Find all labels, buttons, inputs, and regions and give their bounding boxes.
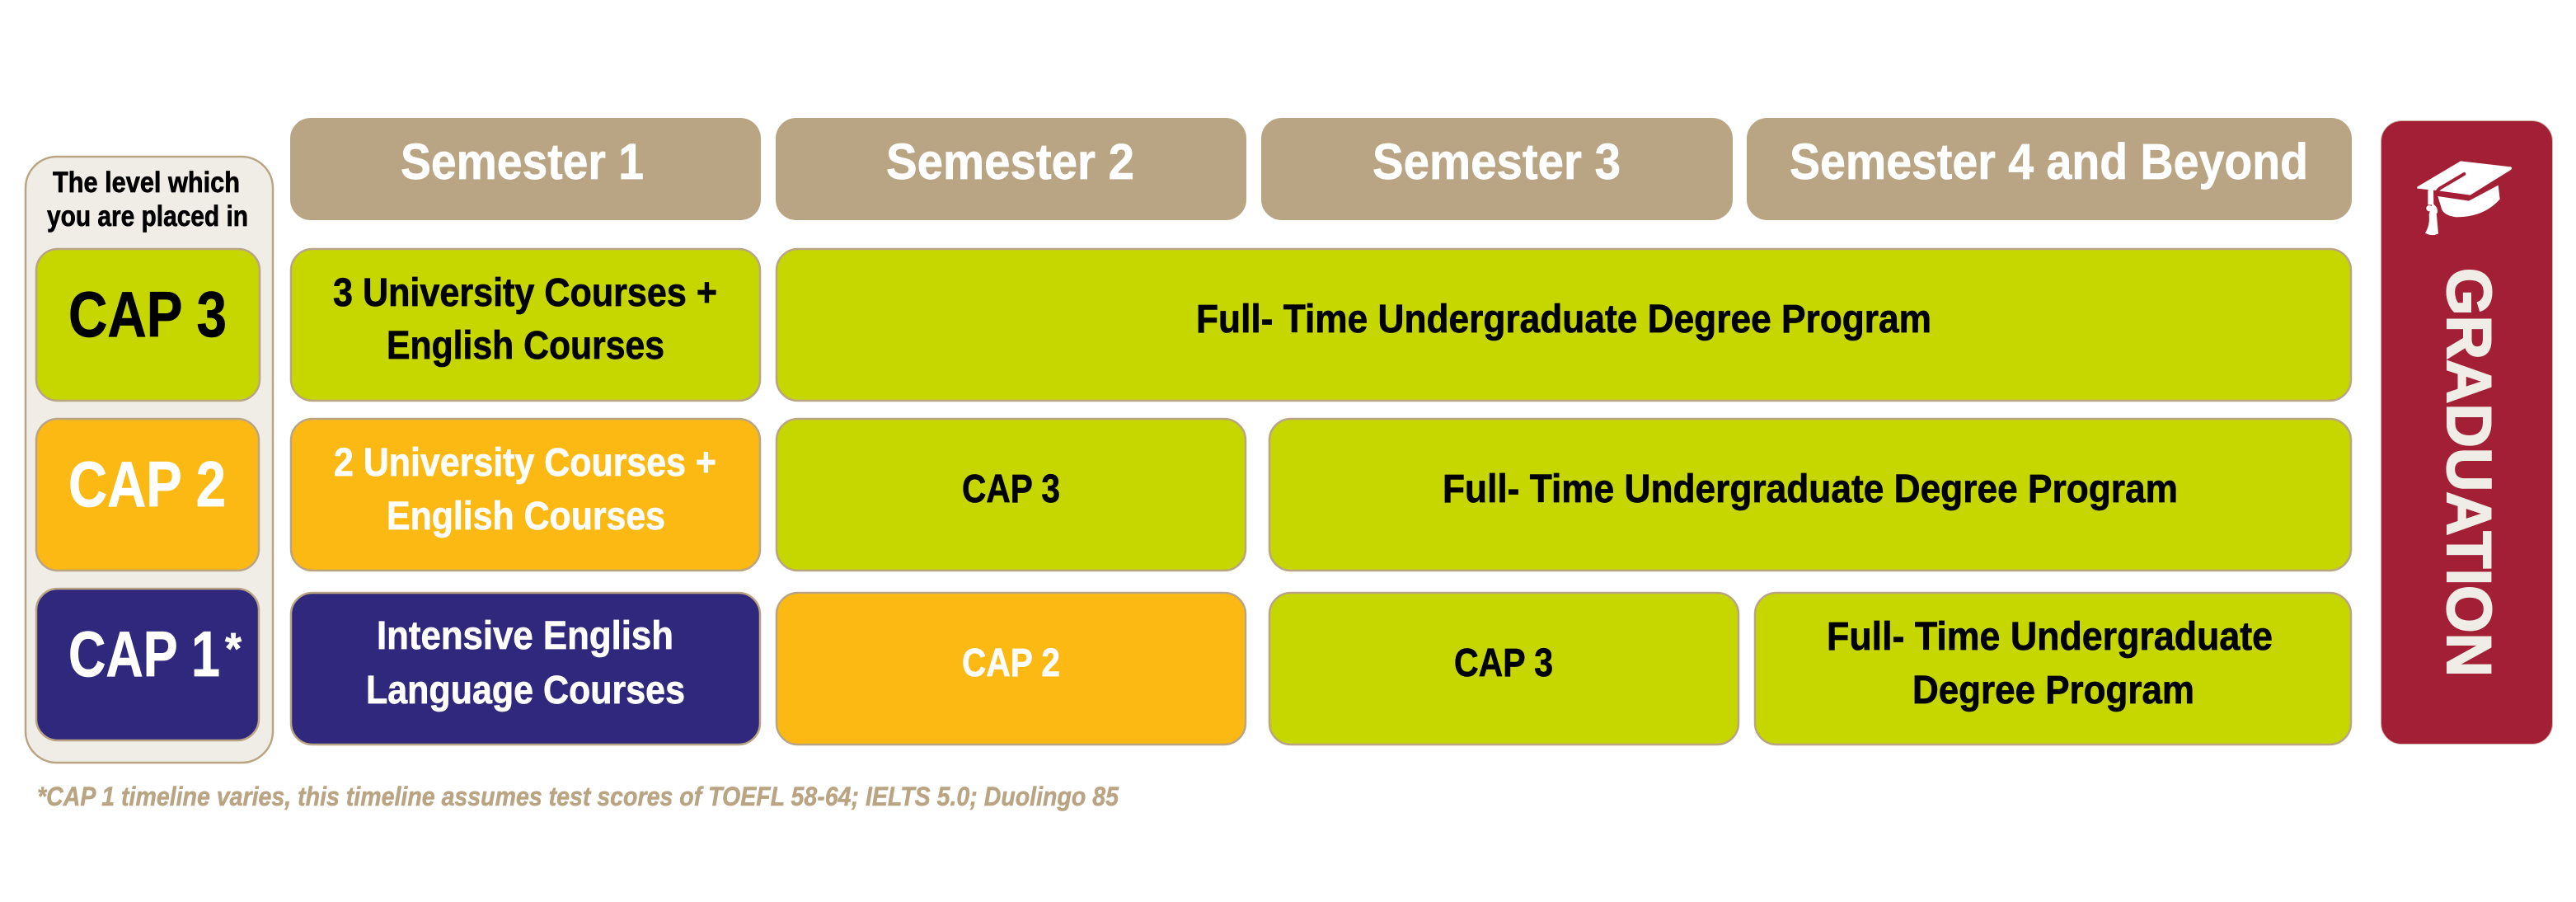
semester header: Semester 1: Semester 1 (401, 134, 644, 190)
semester header: Semester 4 and Beyond: Semester 4 and Beyond (1790, 134, 2308, 190)
row: CAP 1 first semester: Language Courses (366, 669, 685, 712)
level: CAP 2 (36, 419, 259, 571)
level: CAP 1 (36, 589, 259, 740)
level: CAP 1: CAP 1 (68, 618, 220, 690)
row: CAP 1 first semester (291, 593, 760, 745)
row: CAP 2 then CAP 3 (777, 419, 1246, 571)
panel: placement levels (26, 157, 273, 763)
row: CAP 2 degree program (1269, 419, 2351, 571)
row: CAP 3 first semester: 3 University Courses + (333, 271, 717, 315)
semester header: Semester 3 (1261, 118, 1733, 220)
row: CAP 1 degree program: Full- Time Undergraduate (1827, 615, 2273, 659)
vertical label: GRADUATION: GRADUATION (2433, 268, 2503, 677)
row: CAP 1 then CAP 3 (1269, 593, 1738, 745)
row: CAP 3 first semester: English Courses (387, 324, 664, 368)
panel: graduation (2381, 120, 2552, 744)
semester header: Semester 2 (776, 118, 1246, 220)
icon: graduation cap (2417, 161, 2512, 235)
level: CAP 2: CAP 2 (68, 448, 226, 520)
row: CAP 1 then CAP 2 (777, 593, 1246, 745)
semester header: Semester 3: Semester 3 (1372, 134, 1621, 190)
row: CAP 2 then CAP 3: CAP 3 (962, 467, 1060, 511)
row: CAP 1 degree program: Degree Program (1912, 669, 2194, 712)
row: CAP 3 degree program (777, 249, 2351, 401)
heading: the level which you are placed in (47, 167, 248, 233)
level: CAP 3: CAP 3 (68, 278, 227, 350)
row: CAP 3 degree program: Full- Time Undergraduate Degree Program (1196, 298, 1931, 341)
level: CAP 3 (36, 249, 260, 401)
level: CAP 1: * (225, 624, 242, 674)
row: CAP 2 first semester (291, 419, 760, 571)
footnote: *CAP 1 timeline varies, this timeline assumes test scores of TOEFL 58-64; IELTS 5.0; Duolingo 85 (37, 782, 1119, 811)
row: CAP 1 degree program (1755, 593, 2351, 745)
row: CAP 1 first semester: Intensive English (377, 614, 673, 658)
row: CAP 2 degree program: Full- Time Undergraduate Degree Program (1443, 467, 2178, 511)
heading: the level which you are placed in: you are placed in (47, 200, 248, 233)
semester header: Semester 1 (290, 118, 761, 220)
row: CAP 2 first semester: English Courses (387, 495, 665, 538)
row: CAP 2 first semester: 2 University Courses + (334, 441, 716, 485)
semester header: Semester 4 and Beyond (1747, 118, 2352, 220)
heading: the level which you are placed in: The level which (53, 167, 240, 199)
row: CAP 1 then CAP 2: CAP 2 (962, 641, 1060, 685)
row: CAP 1 then CAP 3: CAP 3 (1454, 641, 1553, 685)
row: CAP 3 first semester (291, 249, 760, 401)
semester header: Semester 2: Semester 2 (886, 134, 1134, 190)
